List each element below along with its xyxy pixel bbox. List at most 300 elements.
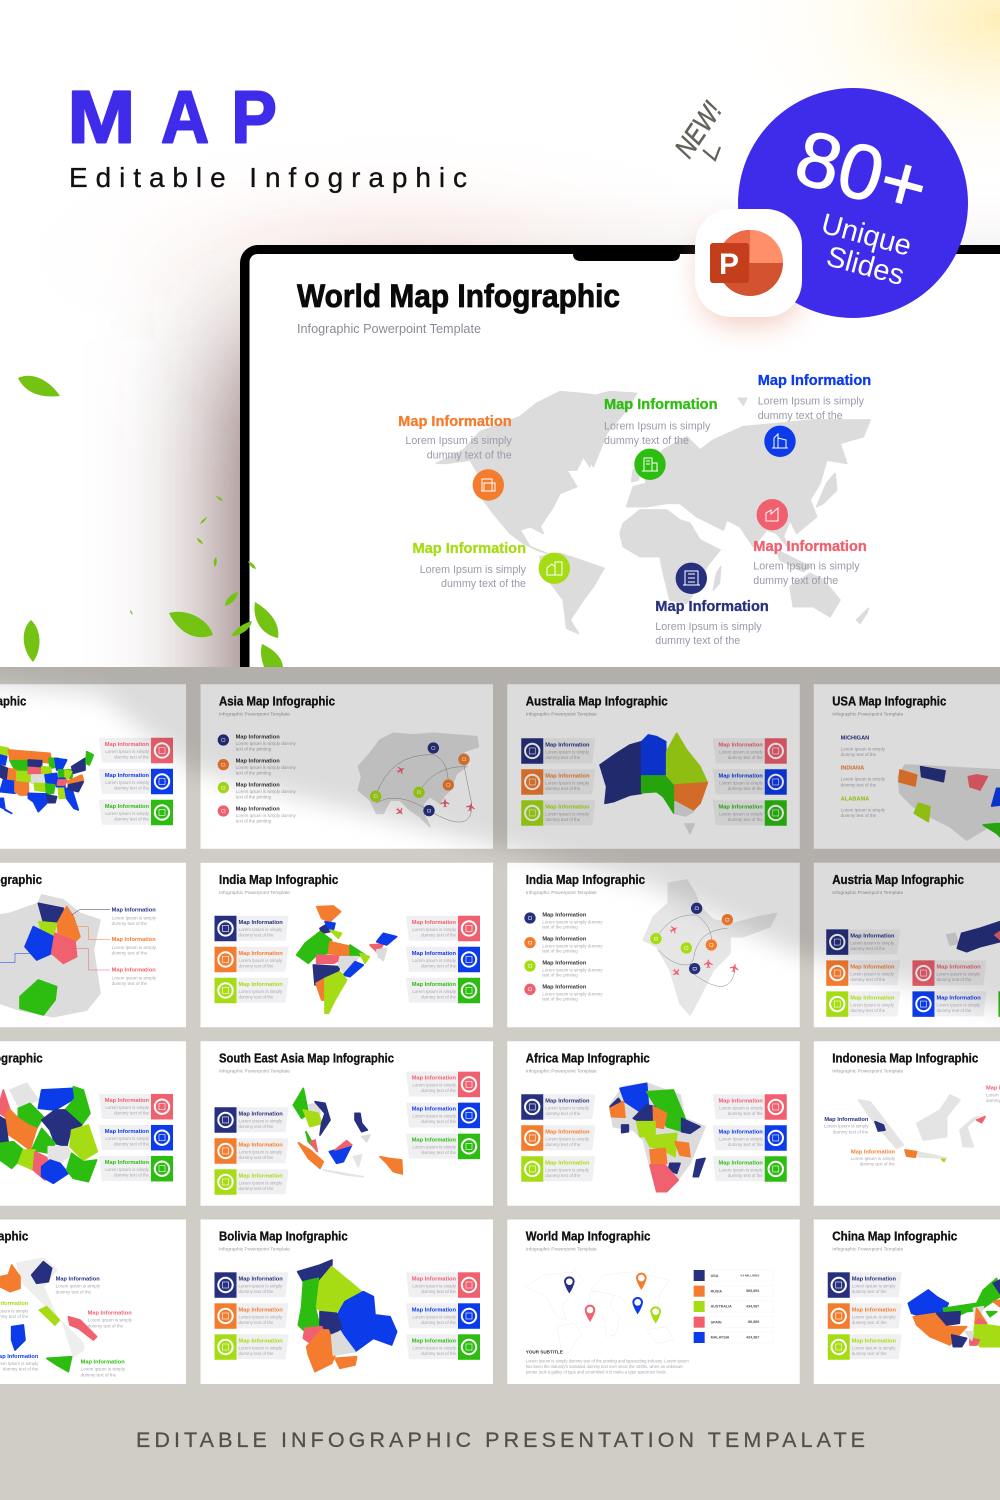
- table: country statistics: 565,854: [746, 1289, 760, 1293]
- slide: Bolivia map: Infographic Powerpoint Template: [219, 1246, 290, 1252]
- info block: lime: Lorem Ipsum is simply: [850, 1002, 895, 1007]
- table: country statistics: USA: [711, 1274, 719, 1278]
- info block: orange: Lorem Ipsum is simply: [238, 1149, 283, 1154]
- slide: Asia map: [200, 684, 493, 849]
- info block: green: [406, 978, 480, 1003]
- label: navy: [56, 1276, 101, 1294]
- map: world with pins: [525, 1272, 673, 1355]
- list item: red: text of the printing: [542, 997, 578, 1002]
- slide: Indonesia map: Indonesia Map Infographic: [832, 1051, 978, 1065]
- info block: blue: Lorem Ipsum is simply: [719, 780, 764, 785]
- info block: red: [912, 960, 986, 986]
- info block: green: Map Information: [719, 804, 763, 810]
- info block: navy: Map Information: [238, 920, 283, 926]
- slide: China map: China Map Infographic: [832, 1230, 957, 1244]
- list item: orange: text of the printing: [542, 949, 578, 954]
- info block: red: Map Information: [412, 1076, 457, 1082]
- callout: orange: dummy text of the: [427, 450, 512, 462]
- table: country statistics: 86,889: [748, 1320, 759, 1324]
- callout: red: [753, 499, 867, 587]
- info block: red: Lorem Ipsum is simply: [719, 1105, 764, 1110]
- info block: navy: Lorem Ipsum is simply: [238, 927, 283, 932]
- slide: USA map with named states: [814, 684, 1000, 849]
- info block: blue: [406, 1303, 480, 1329]
- info block: blue: Map Information: [105, 1129, 150, 1135]
- list item: navy: Map Information: [236, 735, 280, 741]
- info block: red: dummy text of the: [421, 1088, 457, 1093]
- badge: 80+ Unique Slides: Unique: [818, 208, 915, 263]
- list item: orange: Map Information: [542, 937, 587, 943]
- info block: green: Lorem Ipsum is simply: [719, 1167, 764, 1172]
- slide: India map coloured: Infographic Powerpoint Template: [219, 890, 290, 895]
- info block: green: [99, 1156, 173, 1181]
- info block: lime: dummy text of the: [850, 1008, 886, 1013]
- info block: navy: Lorem Ipsum is simply: [545, 1105, 590, 1110]
- label: red: Map Information: [88, 1310, 132, 1316]
- info block: orange: Lorem Ipsum is simply: [545, 1136, 590, 1141]
- slide: India map coloured: India Map Infographic: [219, 873, 338, 887]
- info block: navy: Map Information: [238, 1111, 283, 1117]
- map: Austria: [947, 922, 1000, 952]
- info block: green: [406, 1134, 480, 1159]
- app icon shadow: [700, 225, 800, 325]
- badge: 80+ Unique Slides: [738, 88, 968, 318]
- slide: Africa map: [507, 1041, 800, 1206]
- info block: red: Lorem Ipsum is simply: [105, 749, 150, 754]
- info block: navy: [826, 929, 900, 955]
- list item: orange: text of the printing: [236, 770, 272, 775]
- info block: lime: [521, 1156, 595, 1182]
- shadow cast across slide grid: [0, 640, 1000, 1020]
- label: blue: [0, 1354, 39, 1372]
- slide: Austria map: Austria Map Infographic: [832, 873, 964, 887]
- info block: orange: [214, 947, 288, 972]
- info block: orange: Map Information: [545, 773, 590, 779]
- footer caption: EDITABLE INFOGRAPHIC PRESENTATION TEMPALATE: [136, 1428, 865, 1452]
- info block: lime: dummy text of the: [545, 1173, 581, 1178]
- slide: Austria map: Infographic Powerpoint Template: [832, 890, 904, 895]
- callout: green: dummy text of the: [604, 435, 689, 447]
- info block: lime: [214, 1334, 288, 1360]
- list item: red: [218, 805, 297, 823]
- list item: red: [524, 984, 603, 1002]
- title: MAP: A: [161, 75, 209, 158]
- list item: orange: [218, 759, 297, 775]
- info block: lime: dummy text of the: [852, 1351, 887, 1356]
- list item: orange: [524, 937, 603, 954]
- info block: blue: [99, 769, 173, 794]
- callout: blue: Lorem Ipsum is simply: [758, 396, 865, 408]
- info block: orange: Map Information: [238, 1142, 283, 1148]
- info block: red: Lorem Ipsum is simply: [936, 971, 981, 976]
- info block: green: Map Information: [105, 1160, 150, 1166]
- info block: lime: dummy text of the: [238, 1351, 274, 1356]
- list item: navy: [218, 734, 297, 751]
- map: Italy regions: [0, 1258, 97, 1372]
- info block: navy: Map Information: [545, 1098, 590, 1104]
- callout: green: [604, 397, 718, 480]
- callout: lime: [412, 541, 570, 590]
- laptop mockup with hero slide: [240, 245, 1000, 667]
- slide: South East Asia map: [200, 1041, 493, 1206]
- callout: orange: Lorem Ipsum is simply: [405, 435, 512, 447]
- icon: PowerPoint app: P: [719, 248, 739, 281]
- info block: blue: [99, 1125, 173, 1150]
- info block: blue: Map Information: [105, 773, 150, 779]
- info block: orange: [214, 1303, 288, 1329]
- info block: orange: Map Information: [238, 1307, 283, 1313]
- info block: green: Map Information: [412, 1138, 457, 1144]
- map: Bolivia regions: [298, 1260, 397, 1372]
- info block: red: dummy text of the: [114, 1110, 150, 1115]
- table: country statistics: 434,987: [746, 1335, 759, 1339]
- info block: orange: [826, 960, 900, 986]
- info block: red: Lorem Ipsum is simply: [105, 1105, 150, 1110]
- slide: China map: [814, 1220, 1000, 1384]
- info block: navy: Map Information: [238, 1276, 283, 1282]
- info block: navy: dummy text of the: [850, 946, 886, 951]
- info block: blue: Lorem Ipsum is simply: [719, 1136, 764, 1141]
- info tile: green: [998, 991, 1000, 1017]
- label: orange: dummy text of the: [112, 950, 148, 955]
- info block: orange: Lorem Ipsum is simply: [545, 780, 590, 785]
- callout: lime: dummy text of the: [441, 578, 526, 590]
- info block: green: Lorem Ipsum is simply: [412, 989, 457, 994]
- info block: red: Map Information: [412, 920, 457, 926]
- info block: green: dummy text of the: [421, 994, 457, 999]
- label: green: Lorem Ipsum is simply: [81, 1367, 126, 1372]
- state label: Michigan: MICHIGAN: [841, 735, 869, 741]
- callout: navy: dummy text of the: [655, 635, 740, 647]
- map: South East Asia: [293, 1088, 402, 1177]
- callout: blue: [758, 373, 871, 457]
- list item: red: Map Information: [542, 985, 587, 991]
- state label: Indiana: dummy text of the: [841, 782, 877, 787]
- info block: blue: Lorem Ipsum is simply: [105, 1136, 150, 1141]
- label: navy: Lorem Ipsum is simply: [824, 1124, 869, 1129]
- label: green: dummy text of the: [81, 1372, 117, 1377]
- label: navy: Map Information: [112, 908, 156, 914]
- info block: red: Map Information: [719, 1098, 763, 1104]
- label: orange: Lorem Ipsum is simply: [851, 1156, 896, 1161]
- info block: green: [406, 1334, 480, 1360]
- subtitle and paragraph: Lorem Ipsum is simply dummy text of the printing and typesetting industry. Lorem Ipsum: [526, 1358, 689, 1364]
- list item: navy: Lorem Ipsum is simply dummy: [542, 919, 603, 924]
- info block: lime: Map Information: [545, 1160, 590, 1166]
- info block: navy: [214, 1107, 288, 1133]
- info block: orange: Lorem Ipsum is simply: [852, 1314, 896, 1319]
- info block: red: dummy text of the: [936, 977, 972, 982]
- label: blue: dummy text of the: [3, 1367, 39, 1372]
- info block: blue: [912, 991, 986, 1017]
- label: red: [986, 1085, 1000, 1103]
- slide: Asia map: Infographic Powerpoint Template: [219, 711, 290, 716]
- slide: South East Asia map: Infographic Powerpoint Template: [219, 1068, 290, 1073]
- callout: orange: Map Information: [398, 414, 512, 430]
- info block: green: Map Information: [105, 804, 150, 810]
- info block: navy: Map Information: [850, 933, 895, 939]
- slide: South East Asia map: South East Asia Map Infographic: [219, 1051, 394, 1065]
- icon: PowerPoint app: [695, 209, 802, 317]
- state label: Alabama: [841, 796, 886, 818]
- info block: green: Map Information: [412, 982, 457, 988]
- list item: orange: Lorem Ipsum is simply dummy: [236, 765, 297, 770]
- label: red: [88, 1310, 133, 1328]
- info block: green: [713, 1156, 787, 1182]
- info block: blue: Lorem Ipsum is simply: [412, 1314, 457, 1319]
- info block: navy: dummy text of the: [545, 1111, 581, 1116]
- info block: lime: Map Information: [852, 1338, 897, 1344]
- info block: red: [406, 916, 480, 941]
- info block: lime: Lorem Ipsum is simply: [545, 811, 590, 816]
- slide: China map: Infographic Powerpoint Template: [832, 1246, 904, 1252]
- table: country statistics: 434,987: [746, 1304, 759, 1308]
- info block: green: Lorem Ipsum is simply: [105, 811, 150, 816]
- subtitle: Editable Infographic: Editable Infographic: [69, 162, 467, 193]
- slide: Africa map: Infographic Powerpoint Template: [526, 1068, 597, 1073]
- NEW! hand-lettered tag: NEW!: [668, 96, 728, 163]
- callout: lime: Map Information: [412, 541, 526, 557]
- info block: lime: [214, 978, 288, 1003]
- info block: lime: Lorem Ipsum is simply: [238, 1180, 283, 1185]
- info block: red: [406, 1072, 480, 1097]
- info block: lime: Map Information: [238, 982, 283, 988]
- table: country statistics: MALAYSIA: [711, 1336, 730, 1340]
- info block: blue: dummy text of the: [421, 1320, 457, 1325]
- table: country statistics: 4.4 MILLIONS: [740, 1274, 759, 1278]
- state label: Michigan: [841, 735, 886, 757]
- info block: navy: Map Information: [545, 742, 590, 748]
- info block: navy: dummy text of the: [238, 1289, 274, 1294]
- info block: blue: Map Information: [412, 1107, 457, 1113]
- info block: red: Lorem Ipsum is simply: [412, 927, 457, 932]
- info block: navy: [214, 916, 288, 941]
- label: lime: [0, 1301, 29, 1319]
- info block: orange: dummy text of the: [545, 786, 581, 791]
- slide: Asia map: Asia Map Infographic: [219, 694, 335, 708]
- callout: blue: dummy text of the: [758, 410, 843, 422]
- info block: orange: dummy text of the: [238, 1320, 274, 1325]
- label: navy: Map Information: [824, 1117, 869, 1123]
- slide: Indonesia map: Infographic Powerpoint Template: [832, 1068, 904, 1073]
- info block: green: Lorem Ipsum is simply: [719, 811, 764, 816]
- list item: navy: Map Information: [542, 913, 587, 919]
- info block: navy: Lorem Ipsum is simply: [852, 1283, 896, 1288]
- label: orange: dummy text of the: [860, 1162, 896, 1167]
- hero subheading: Infographic Powerpoint Template: [297, 322, 481, 336]
- list item: orange: Map Information: [236, 759, 280, 765]
- slide: Italy map: [0, 1220, 186, 1384]
- label: orange: Map Information: [112, 937, 156, 943]
- info block: blue: [713, 1125, 787, 1151]
- map: China provinces: [908, 1278, 1000, 1347]
- info block: blue: [406, 947, 480, 972]
- info block: orange: [214, 1138, 288, 1164]
- subtitle and paragraph: [526, 1350, 689, 1374]
- info block: red: [99, 1094, 173, 1119]
- state label: Alabama: ALABAMA: [841, 796, 869, 802]
- list item: orange: Lorem Ipsum is simply dummy: [542, 943, 603, 948]
- slide: India map with routes: Infographic Powerpoint Template: [526, 890, 597, 895]
- info block: blue: dummy text of the: [728, 1142, 763, 1147]
- label: red: dummy text of the: [112, 981, 148, 986]
- info block: red: dummy text of the: [114, 754, 150, 759]
- info block: lime: Map Information: [238, 1173, 283, 1179]
- label: orange: Map Information: [851, 1149, 896, 1155]
- label: red: Map Information: [112, 968, 156, 974]
- info block: green: dummy text of the: [728, 1173, 763, 1178]
- label: navy: [824, 1117, 869, 1134]
- page background: [138, 0, 1000, 667]
- label: navy: dummy text of the: [56, 1289, 92, 1294]
- info block: red: Map Information: [105, 742, 150, 748]
- info block: lime: [828, 1334, 902, 1360]
- info block: navy: dummy text of the: [238, 1124, 274, 1129]
- info block: orange: Map Information: [852, 1307, 897, 1313]
- lower band background: [0, 667, 1000, 1500]
- info block: blue: Lorem Ipsum is simply: [105, 780, 150, 785]
- info block: lime: Lorem Ipsum is simply: [238, 1345, 283, 1350]
- label: navy: dummy text of the: [833, 1129, 869, 1134]
- info block: green: dummy text of the: [114, 816, 150, 821]
- info block: orange: [521, 1125, 595, 1151]
- info block: blue: dummy text of the: [728, 786, 763, 791]
- slide: Poland map: [0, 1041, 186, 1206]
- info block: navy: dummy text of the: [238, 932, 274, 937]
- info block: red: dummy text of the: [421, 1289, 457, 1294]
- info block: red: Lorem Ipsum is simply: [412, 1283, 457, 1288]
- info block: lime: [826, 991, 900, 1017]
- info block: red: Lorem Ipsum is simply: [412, 1083, 457, 1088]
- info block: lime: Lorem Ipsum is simply: [545, 1167, 590, 1172]
- label: red: Lorem Ipsum is simply: [88, 1318, 133, 1323]
- info block: green: Lorem Ipsum is simply: [412, 1145, 457, 1150]
- label: orange: Lorem Ipsum is simply: [112, 945, 157, 950]
- label: navy: [112, 908, 157, 926]
- info block: red: [713, 1094, 787, 1120]
- slide: India map with routes: [507, 863, 800, 1027]
- info block: lime: Lorem Ipsum is simply: [238, 989, 283, 994]
- list item: red: text of the printing: [236, 818, 272, 823]
- info block: red: Map Information: [719, 742, 763, 748]
- info block: blue: Lorem Ipsum is simply: [412, 958, 457, 963]
- info block: orange: [521, 769, 595, 795]
- info block: blue: Map Information: [719, 1129, 763, 1135]
- info block: red: [713, 738, 787, 764]
- slide: World map with table: [507, 1220, 800, 1384]
- leaves: [18, 376, 283, 667]
- slide grid: [0, 684, 1000, 1384]
- slide: World map with table: World Map Infographic: [526, 1230, 650, 1244]
- slide: Africa map: Africa Map Infographic: [526, 1051, 650, 1065]
- callout: navy: [655, 563, 769, 647]
- info block: green: Map Information: [719, 1160, 763, 1166]
- table: country statistics: AUSTRALIA: [711, 1305, 732, 1309]
- callout: blue: Map Information: [758, 373, 871, 389]
- info block: orange: Lorem Ipsum is simply: [850, 971, 895, 976]
- list item: lime: [524, 960, 603, 978]
- list item: navy: text of the printing: [542, 925, 578, 930]
- slide: Bolivia map: [200, 1220, 493, 1384]
- label: red: Lorem Ipsum is simply: [112, 976, 157, 981]
- info block: orange: Lorem Ipsum is simply: [238, 958, 283, 963]
- info block: navy: dummy text of the: [545, 755, 581, 760]
- info block: navy: dummy text of the: [852, 1289, 887, 1294]
- info block: green: Map Information: [412, 1338, 457, 1344]
- info block: blue: dummy text of the: [421, 963, 457, 968]
- hero heading: World Map Infographic: [297, 278, 620, 314]
- info block: orange: dummy text of the: [238, 963, 274, 968]
- table: country statistics: SPAIN: [711, 1320, 722, 1324]
- state label: Indiana: INDIANA: [841, 766, 864, 772]
- label: navy: Lorem Ipsum is simply: [56, 1283, 101, 1288]
- callout: navy: Lorem Ipsum is simply: [655, 621, 762, 633]
- info block: green: [99, 800, 173, 825]
- label: navy: Lorem Ipsum is simply: [112, 916, 157, 921]
- label: red: [112, 968, 157, 986]
- info block: green: [713, 800, 787, 826]
- info block: lime: dummy text of the: [238, 1186, 274, 1191]
- info block: red: Map Information: [412, 1276, 457, 1282]
- list item: red: Lorem Ipsum is simply dummy: [236, 813, 297, 818]
- info block: navy: Lorem Ipsum is simply: [238, 1283, 283, 1288]
- info block: lime: [214, 1169, 288, 1195]
- slide: India map coloured: [200, 863, 493, 1027]
- info block: blue: Map Information: [936, 995, 981, 1001]
- info block: orange: Map Information: [850, 964, 895, 970]
- map: Australia: [600, 733, 707, 833]
- info block: orange: Map Information: [238, 951, 283, 957]
- state label: Alabama: dummy text of the: [841, 813, 877, 818]
- label: orange: [851, 1149, 896, 1167]
- info block: lime: dummy text of the: [545, 817, 581, 822]
- info block: blue: dummy text of the: [421, 1119, 457, 1124]
- slide: India map with routes: India Map Infographic: [526, 873, 645, 887]
- slide: Austria map: [814, 863, 1000, 1027]
- title: MAP: M: [68, 77, 135, 159]
- list item: lime: Lorem Ipsum is simply dummy: [236, 789, 297, 794]
- info block: navy: Lorem Ipsum is simply: [850, 940, 895, 945]
- label: green: Map Information: [81, 1360, 125, 1366]
- info block: navy: [828, 1272, 902, 1298]
- list item: lime: text of the printing: [542, 973, 578, 978]
- info block: orange: [828, 1303, 902, 1329]
- title: MAP: P: [231, 77, 277, 159]
- info block: lime: Map Information: [545, 804, 590, 810]
- callout: lime: Lorem Ipsum is simply: [420, 564, 527, 576]
- map: USA highlighted states: [898, 765, 1000, 840]
- slide: Indonesia map: [814, 1041, 1000, 1206]
- list item: navy: [524, 912, 603, 930]
- info block: blue: [713, 769, 787, 795]
- subtitle and paragraph: YOUR SUBTITLE: [526, 1350, 563, 1354]
- world map: [437, 392, 870, 633]
- badge: 80+ Unique Slides: 80+: [787, 112, 937, 232]
- info block: lime: [521, 800, 595, 826]
- state label: Alabama: Lorem Ipsum is simply: [841, 808, 886, 813]
- info block: navy: Lorem Ipsum is simply: [238, 1118, 283, 1123]
- callout: green: Map Information: [604, 397, 718, 413]
- table: country statistics: [694, 1270, 774, 1343]
- list item: navy: text of the printing: [236, 746, 272, 751]
- info block: lime: Map Information: [850, 995, 895, 1001]
- map: Poland regions: [0, 1083, 97, 1183]
- info block: blue: dummy text of the: [114, 785, 150, 790]
- info block: orange: dummy text of the: [545, 1142, 581, 1147]
- info block: blue: [406, 1103, 480, 1128]
- info block: navy: [521, 738, 595, 764]
- slide: Australia map: Australia Map Infographic: [526, 694, 668, 708]
